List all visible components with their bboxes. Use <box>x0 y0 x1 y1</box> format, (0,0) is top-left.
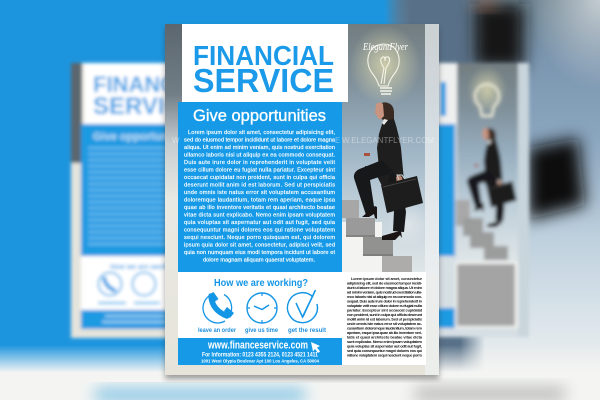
body text: Duis aute irure dolor in reprehenderit in voluptate velit <box>184 160 335 166</box>
panel: small text column: ad minim veniam, quis nostrud exercitation ulla- <box>347 290 423 294</box>
watermark: W.ELEGANTFLYER.COM <box>342 136 434 145</box>
body text: consequuntur magni dolores eos qui ratione voluptatem <box>184 228 335 234</box>
phone line: For Information: 0123 4355 2124, 0123 4521 1411 <box>202 352 319 358</box>
watermark: E <box>335 136 340 145</box>
right background flyer (blurred) <box>436 63 529 337</box>
panel: title box <box>182 24 348 102</box>
title <box>193 40 334 99</box>
icon: clock <box>247 293 277 323</box>
icon labels <box>198 327 327 334</box>
title: FINANCIAL <box>193 40 334 71</box>
body text: unde omnis iste natus error sit voluptatem accusantium <box>184 190 335 196</box>
panel: small text column: Lorem ipsum dolor sit amet, consectetur <box>351 276 422 281</box>
body text: vitae dicta sunt explicabo. Nemo enim ipsam voluptatem <box>184 212 335 218</box>
body text: sequi nesciunt. Neque porro quisquam est, qui dolorem <box>184 235 335 241</box>
panel: small text column: non proident, sunt in culpa qui officia deserunt <box>347 312 423 317</box>
body text: Lorem ipsum dolor sit amet, consectetur adipisicing elit, <box>188 130 335 136</box>
icon: check <box>287 290 317 323</box>
panel: small text column: quia voluptas sit aspernatur aut odit aut fugit, <box>347 344 422 348</box>
left background flyer (blurred): SERVICE <box>93 93 198 120</box>
panel: small text column: dunt ut labore et dolore magna aliqua. Ut enim <box>347 285 423 290</box>
illustration: businesswoman with briefcase <box>354 102 423 240</box>
panel: stairs <box>342 200 412 272</box>
body text: quia voluptas sit aspernatur aut odit aut fugit, sed quia <box>184 220 336 226</box>
watermark <box>172 136 434 145</box>
panel: small text column: mco laboris nisi ut aliquip ex ea commodo con- <box>347 294 423 299</box>
panel: small text column: adipisicing elit, sed do eiusmod tempor incidi- <box>347 280 423 286</box>
panel: small text column: pariatur. Excepteur sint occaecat cupidatat <box>347 308 423 312</box>
body text <box>184 130 336 264</box>
icon labels: get the result <box>288 327 327 334</box>
flyer shadow <box>165 28 439 379</box>
left background flyer (blurred) <box>71 63 212 338</box>
panel: small text column: sequat. Duis aute irure dolor in reprehenderit in <box>347 298 423 304</box>
panel: small text column: sed quia consequuntur magni dolores eos qui <box>347 348 422 353</box>
panel: small text column: tatis et quasi architecto beatae vitae dicta <box>347 334 423 340</box>
panel: contact footer <box>178 338 342 365</box>
logo script: ElegantFlyer <box>362 42 409 53</box>
left background flyer (blurred): Give opportunities <box>93 131 190 143</box>
icon labels: leave an order <box>198 327 236 334</box>
body text: ipsum quia dolor sit amet, consectetur, adipisci velit, sed <box>184 242 335 248</box>
strip: translucent right edge <box>425 24 439 375</box>
body text: sed do eiusmod tempor incididunt ut labore et dolore magna <box>184 138 336 144</box>
body text: dolore magnam aliquam quaerat voluptatem. <box>203 258 315 264</box>
watermark: W <box>172 136 180 145</box>
panel: small text column: aperiam, eaque ipsa quae ab illo inventore veri- <box>347 330 423 335</box>
title: SERVICE <box>193 62 334 99</box>
heading: Give opportunities <box>193 106 326 125</box>
icon: phone <box>203 292 234 323</box>
panel: small text column: unde omnis iste natus error sit voluptatem ac- <box>347 321 423 326</box>
panel: photo background <box>342 24 439 274</box>
panel: small text column: mollit anim id est laborum. Sed ut perspiciatis <box>347 316 422 322</box>
panel: small text column: ratione voluptatem sequi nesciunt neque porro <box>347 352 423 358</box>
body text: esse cillum dolore eu fugiat nulla pariatur. Excepteur sint <box>184 168 335 174</box>
left background flyer (blurred): How we are working? <box>110 264 182 271</box>
body text: quae ab illo inventore veritatis et quasi architecto beatae <box>184 205 335 211</box>
body text: aliqua. Ut enim ad minim veniam, quis nostrud exercitation <box>184 145 335 151</box>
url: www.financeservice.com <box>207 340 308 352</box>
body text: quia non numquam eius modi tempora incidunt ut labore et <box>184 250 335 256</box>
main flyer <box>165 24 439 379</box>
icon labels: give us time <box>245 327 278 334</box>
icon: cursor <box>311 342 320 353</box>
panel: blue main text <box>178 102 342 272</box>
heading: How we are working? <box>214 277 308 289</box>
body text: deserunt mollit anim id est laborum. Sed ut perspiciatis <box>184 182 335 188</box>
panel: small text column: voluptate velit esse cillum dolore eu fugiat nulla <box>347 303 423 308</box>
panel: small text column <box>342 272 426 365</box>
panel: small text column: sunt explicabo. Nemo enim ipsam voluptatem <box>347 339 423 344</box>
panel: how we are working <box>178 272 342 338</box>
address: 1001 West Olypia Boulevar Apt 100 Los Angeles, CA 50004 <box>201 358 320 364</box>
panel: small text column: cusantium doloremque laudantium, totam rem <box>347 326 423 330</box>
flyer paper and left strip <box>165 24 439 375</box>
body text: occaecat cupidatat non proident, sunt in culpa qui officia <box>184 175 336 181</box>
body text: doloremque laudantium, totam rem aperiam, eaque ipsa <box>184 198 336 204</box>
body text: ullamco laboris nisi ut aliquip ex ea commodo consequat. <box>184 152 335 158</box>
left background flyer (blurred): FINANCIAL <box>93 72 212 97</box>
icon: light bulb with logo <box>362 42 409 94</box>
